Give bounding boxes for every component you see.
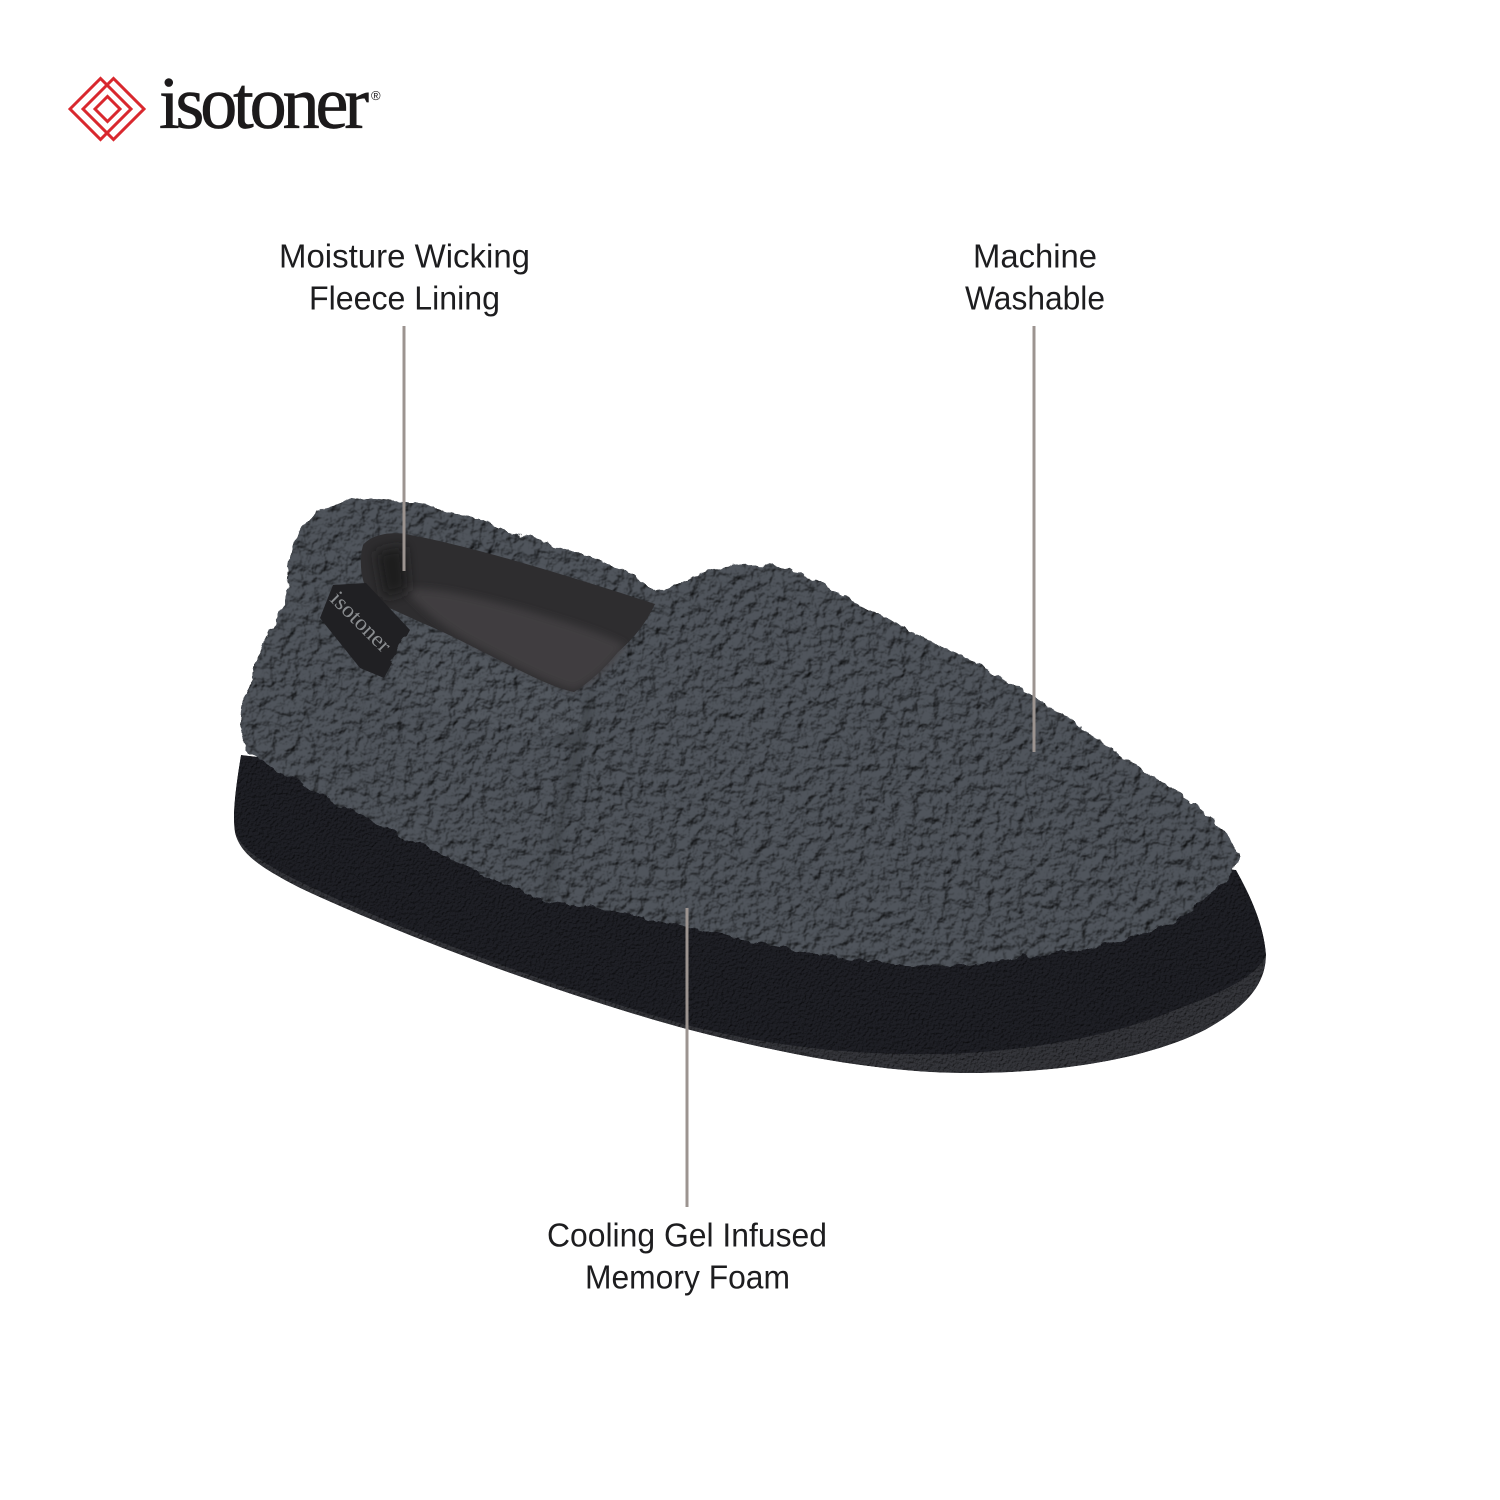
sole upper band [234,755,1266,1054]
label: Washable [965,280,1105,316]
label: Memory Foam [585,1258,790,1296]
lining lighter fleece floor [405,589,625,690]
leader line [1032,326,1036,752]
callout: cooling gel infused memory foam [547,908,827,1296]
tag text: isotoner [325,586,397,658]
fleece flap over tag [390,630,582,738]
label: Machine [973,238,1097,274]
callout: moisture wicking fleece lining [279,238,530,571]
outsole [234,755,1266,1073]
leader line [402,326,406,571]
icon: red nested diamonds [70,78,144,140]
seam shading [410,675,590,895]
heel tag with logo [320,583,410,678]
leader line [686,908,688,1207]
logo: isotoner [70,63,381,145]
callout: machine washable [965,238,1105,752]
label: Cooling Gel Infused [547,1216,827,1254]
lining opening [361,533,655,692]
slipper product illustration [234,498,1266,1073]
label: Moisture Wicking [279,238,530,274]
label: Fleece Lining [309,280,500,316]
wordmark: isotoner [159,63,369,145]
registered mark: ® [371,88,381,103]
fleece upper [240,498,1240,966]
inner heel shadow [376,546,408,598]
